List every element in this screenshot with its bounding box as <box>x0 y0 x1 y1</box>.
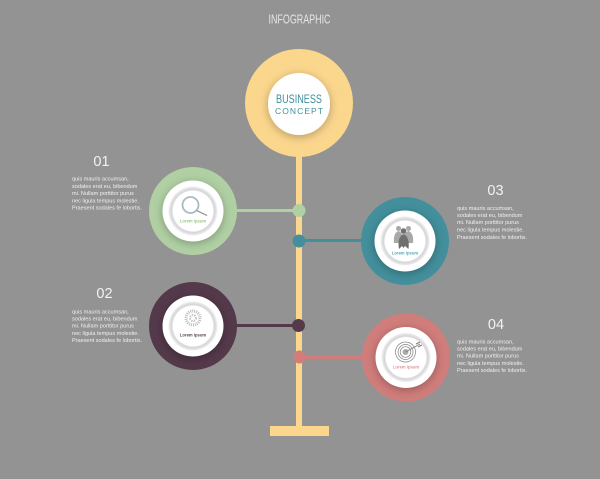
panel: step 03 <box>292 183 527 285</box>
number 01: 01 <box>93 154 110 170</box>
text block 02: sodales erat eu, bibendum <box>72 316 138 322</box>
panel: central business concept circle: CONCEPT <box>275 106 323 116</box>
text block 01: sodales erat eu, bibendum <box>72 184 138 190</box>
title: INFOGRAPHIC <box>268 12 330 26</box>
text block 01: Praesent sodales fe lobortis. <box>72 206 142 212</box>
number 03: 03 <box>487 183 504 199</box>
icon: target with arrow <box>396 342 422 362</box>
text block 02: quis mauris accumsan, <box>72 310 129 316</box>
icon: group of people <box>394 226 413 249</box>
circle 01 label: Lorem ipsum <box>180 218 206 224</box>
number 04: 04 <box>488 317 504 333</box>
circle 04 label: Lorem ipsum <box>393 364 419 370</box>
panel: central business concept circle <box>245 49 353 157</box>
text block 03: quis mauris accumsan, <box>457 206 514 212</box>
icon: gear wheel <box>186 311 200 325</box>
text block 01: quis mauris accumsan, <box>72 176 129 182</box>
connector 04 <box>293 350 363 364</box>
circle 02 <box>149 282 237 370</box>
panel: central business concept circle: BUSINESS <box>276 94 322 106</box>
text block 03: nec ligula tempus molestie. <box>457 228 524 234</box>
text block 02: nec ligula tempus molestie. <box>72 331 139 337</box>
circle 03 label: Lorem ipsum <box>392 250 418 256</box>
text block 02: Praesent sodales fe lobortis. <box>72 338 142 344</box>
panel: step 04 <box>293 314 527 402</box>
text block 04: nec ligula tempus molestie. <box>457 361 524 367</box>
text block 03: mi. Nullam porttitor purus <box>457 220 519 226</box>
circle 01 <box>149 167 237 255</box>
panel: step 02 <box>72 282 305 370</box>
text block 04: Praesent sodales fe lobortis. <box>457 368 527 374</box>
number 02: 02 <box>96 286 113 302</box>
text block 01: nec ligula tempus molestie. <box>72 198 139 204</box>
text block 04: sodales erat eu, bibendum <box>457 346 523 352</box>
text block 02: mi. Nullam porttitor purus <box>72 324 134 330</box>
circle 04 <box>362 314 450 402</box>
connector 03 <box>292 234 362 248</box>
text block 03: sodales erat eu, bibendum <box>457 213 523 219</box>
text block 01: mi. Nullam porttitor purus <box>72 191 134 197</box>
connector 01 <box>236 204 306 217</box>
text block 04: quis mauris accumsan, <box>457 340 514 346</box>
circle 02 label: Lorem ipsum <box>180 332 206 338</box>
icon: magnifying glass <box>182 197 207 216</box>
connector 02 <box>236 319 305 332</box>
text block 03: Praesent sodales fe lobortis. <box>457 235 527 241</box>
text block 04: mi. Nullam porttitor purus <box>457 354 519 360</box>
circle 03 <box>361 197 449 285</box>
panel: step 01 <box>72 154 306 255</box>
vertical stem and base <box>270 150 329 436</box>
